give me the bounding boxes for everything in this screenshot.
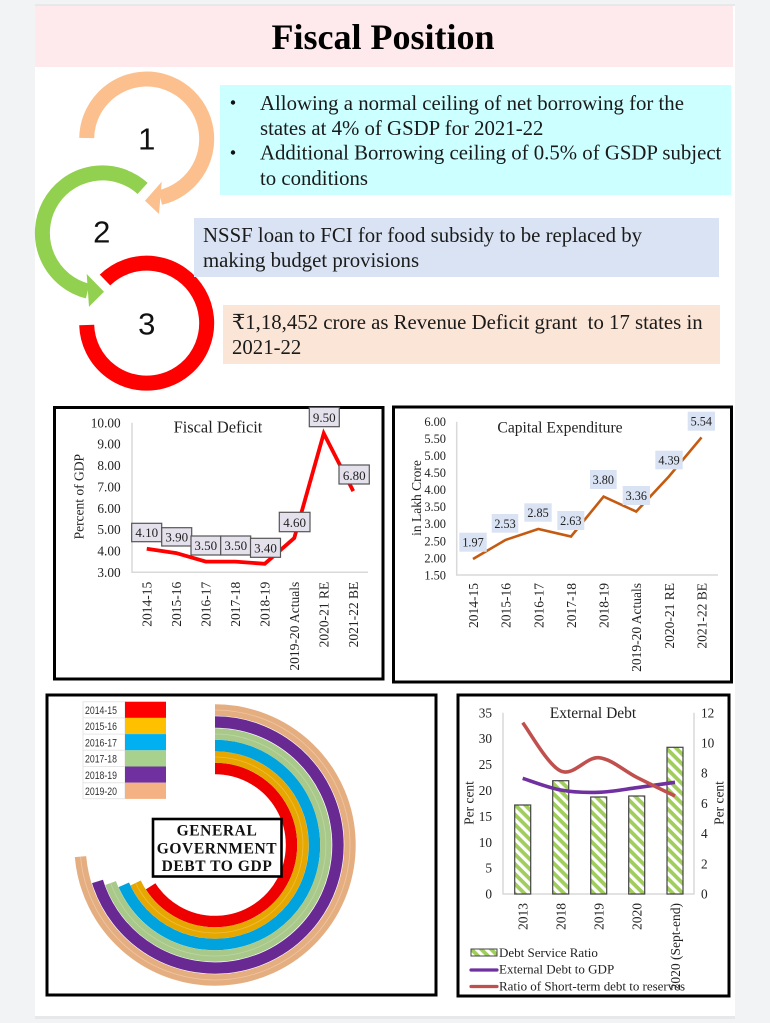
y axis ticks: 10.00 — [91, 415, 121, 430]
left axis labels: 0 — [485, 887, 492, 902]
y axis ticks: 5.00 — [97, 522, 121, 537]
right axis labels: 2 — [701, 856, 708, 871]
arrow 2 — [42, 173, 143, 307]
text block: borrowing ceiling — [220, 85, 731, 195]
x axis labels: 2016-17 — [531, 583, 546, 628]
capital expenditure line — [473, 437, 702, 559]
left axis labels: 10 — [479, 835, 492, 850]
x axis labels: 2018 — [554, 903, 569, 930]
x axis labels: 2019-20 Actuals — [629, 583, 644, 672]
data labels: 3.80 — [593, 473, 614, 487]
panel: general government debt to GDP — [47, 695, 436, 995]
y axis ticks: 6.00 — [424, 415, 446, 429]
y axis ticks: 6.00 — [97, 501, 121, 516]
y axis ticks: 3.00 — [424, 517, 446, 531]
x axis labels — [140, 581, 361, 671]
text block: borrowing ceiling: to conditions — [260, 167, 368, 190]
panel: fiscal deficit chart — [54, 407, 383, 679]
chart title: Capital Expenditure — [497, 420, 623, 437]
fiscal deficit line — [147, 433, 353, 564]
y axis ticks: 2.00 — [424, 551, 446, 565]
x axis labels: 2014-15 — [466, 583, 481, 628]
y axis label: in Lakh Crore — [409, 460, 424, 536]
y axis ticks — [91, 415, 121, 580]
x axis labels: 2016-17 — [199, 581, 214, 627]
arrow 1 — [87, 79, 207, 214]
y axis ticks: 4.00 — [97, 544, 121, 559]
x axis labels: 2018-19 — [258, 581, 273, 627]
cycle arrows 1 2 3 — [42, 79, 207, 383]
data labels — [132, 407, 369, 557]
x axis labels: 2019 — [592, 903, 607, 930]
x axis labels: 2021-22 BE — [346, 582, 361, 647]
panel: capital expenditure chart — [394, 407, 732, 682]
title: Fiscal Position — [272, 17, 494, 57]
right axis labels: 10 — [701, 736, 715, 750]
y axis ticks: 9.00 — [97, 437, 121, 452]
right axis labels: 12 — [701, 705, 714, 720]
data labels: 3.36 — [626, 489, 647, 503]
legend: 2015-16 — [85, 721, 117, 733]
data labels: 2.63 — [560, 514, 581, 528]
text block: NSSF loan: making budget provisions — [203, 249, 419, 272]
y axis label: Percent of GDP — [72, 454, 86, 539]
left axis labels: 25 — [479, 757, 492, 772]
legend: 2017-18 — [85, 754, 117, 766]
legend: External Debt to GDP — [499, 962, 614, 976]
x axis labels: 2020 — [630, 903, 645, 930]
legend — [471, 945, 685, 994]
data labels: 4.39 — [658, 454, 680, 468]
x axis labels: 2020-21 RE — [662, 583, 677, 649]
x axis labels — [516, 903, 683, 990]
chart title: Fiscal Deficit — [174, 418, 263, 437]
text block: NSSF loan — [194, 218, 719, 277]
x axis labels: 2017-18 — [228, 581, 243, 627]
center title box: GENERAL — [177, 823, 257, 840]
y axis ticks: 7.00 — [97, 480, 121, 494]
right axis labels — [701, 705, 726, 902]
right axis labels: 6 — [701, 796, 708, 811]
x axis labels: 2020-21 RE — [317, 582, 332, 647]
arrow 2: 2 — [93, 214, 110, 249]
arrow 3 — [87, 263, 207, 383]
left axis labels: 30 — [479, 731, 492, 746]
data labels: 3.50 — [194, 538, 217, 553]
data labels: 2.53 — [494, 517, 516, 531]
arrow 3: 3 — [138, 306, 155, 341]
data labels: 6.80 — [343, 468, 366, 483]
left axis labels: 5 — [485, 861, 492, 876]
legend: Debt Service Ratio — [499, 945, 598, 960]
legend: 2016-17 — [85, 737, 117, 749]
left axis labels: 20 — [479, 783, 492, 798]
text block: revenue deficit grant: 2021-22 — [232, 336, 301, 359]
data labels: 5.54 — [691, 414, 712, 428]
center title box: DEBT TO GDP — [162, 858, 272, 875]
legend — [83, 702, 166, 799]
x axis labels: 2019-20 Actuals — [287, 582, 302, 671]
x axis labels: 2020 (Sept-end) — [668, 903, 683, 990]
y axis ticks: 5.50 — [424, 432, 446, 446]
data labels: 3.40 — [254, 540, 277, 556]
data labels: 3.50 — [224, 538, 247, 553]
title — [35, 6, 733, 67]
right axis labels: 4 — [701, 826, 708, 841]
radial rings — [80, 710, 350, 980]
data labels: 9.50 — [313, 410, 336, 425]
y axis ticks: 8.00 — [97, 458, 121, 473]
y axis ticks: 4.50 — [424, 466, 446, 480]
chart title: External Debt — [550, 705, 637, 722]
x axis labels: 2014-15 — [140, 581, 155, 627]
x axis labels — [466, 583, 710, 672]
panel: external debt chart — [458, 695, 729, 996]
x axis labels: 2021-22 BE — [694, 583, 710, 649]
text block: borrowing ceiling: states at 4% of GSDP for 2021-22 — [260, 117, 543, 140]
x axis labels: 2017-18 — [564, 583, 579, 628]
left axis labels: Per cent — [462, 781, 476, 825]
data labels: 4.60 — [283, 515, 306, 530]
y axis ticks: 4.00 — [424, 483, 446, 497]
left axis labels — [462, 705, 492, 902]
x axis labels: 2015-16 — [499, 583, 514, 628]
y axis ticks: 1.50 — [424, 568, 446, 582]
text block: borrowing ceiling: Allowing a normal ceiling of net borrowing for the — [260, 92, 684, 115]
legend: 2014-15 — [85, 705, 117, 717]
data labels: 1.97 — [462, 536, 484, 550]
center title box — [153, 819, 282, 876]
right axis labels: 8 — [701, 766, 708, 781]
y axis ticks: 2.50 — [424, 534, 446, 548]
arrow 1: 1 — [138, 121, 155, 156]
y axis ticks: 3.50 — [424, 500, 446, 514]
text block: revenue deficit grant — [223, 305, 720, 364]
x axis labels: 2013 — [516, 903, 531, 930]
legend: 2018-19 — [85, 770, 117, 782]
text block: NSSF loan: NSSF loan to FCI for food subsidy to be replaced by — [203, 224, 643, 247]
center title box: GOVERNMENT — [157, 840, 277, 857]
data labels — [459, 412, 715, 552]
left axis labels: 15 — [479, 809, 492, 824]
y axis ticks — [424, 415, 446, 582]
x axis labels: 2015-16 — [169, 581, 184, 627]
left axis labels: 35 — [479, 705, 492, 720]
text block: revenue deficit grant: ₹1,18,452 crore as Revenue Deficit grant to 17 states in — [232, 311, 703, 334]
y axis ticks: 5.00 — [424, 449, 446, 463]
data labels: 2.85 — [527, 506, 549, 520]
bars: debt service ratio — [515, 747, 683, 894]
right axis labels: 0 — [701, 887, 708, 902]
data labels: 4.10 — [135, 525, 158, 540]
y axis ticks: 3.00 — [97, 565, 121, 580]
x axis labels: 2018-19 — [597, 583, 612, 628]
text block: borrowing ceiling: Additional Borrowing ceiling of 0.5% of GSDP subject — [260, 142, 722, 164]
data labels: 3.90 — [165, 530, 188, 544]
legend: Ratio of Short-term debt to reserves — [499, 979, 685, 994]
legend: 2019-20 — [85, 786, 117, 798]
right axis labels: Per cent — [712, 781, 726, 825]
line: short-term debt to reserves — [523, 723, 675, 796]
line: external debt to GDP — [523, 778, 675, 792]
